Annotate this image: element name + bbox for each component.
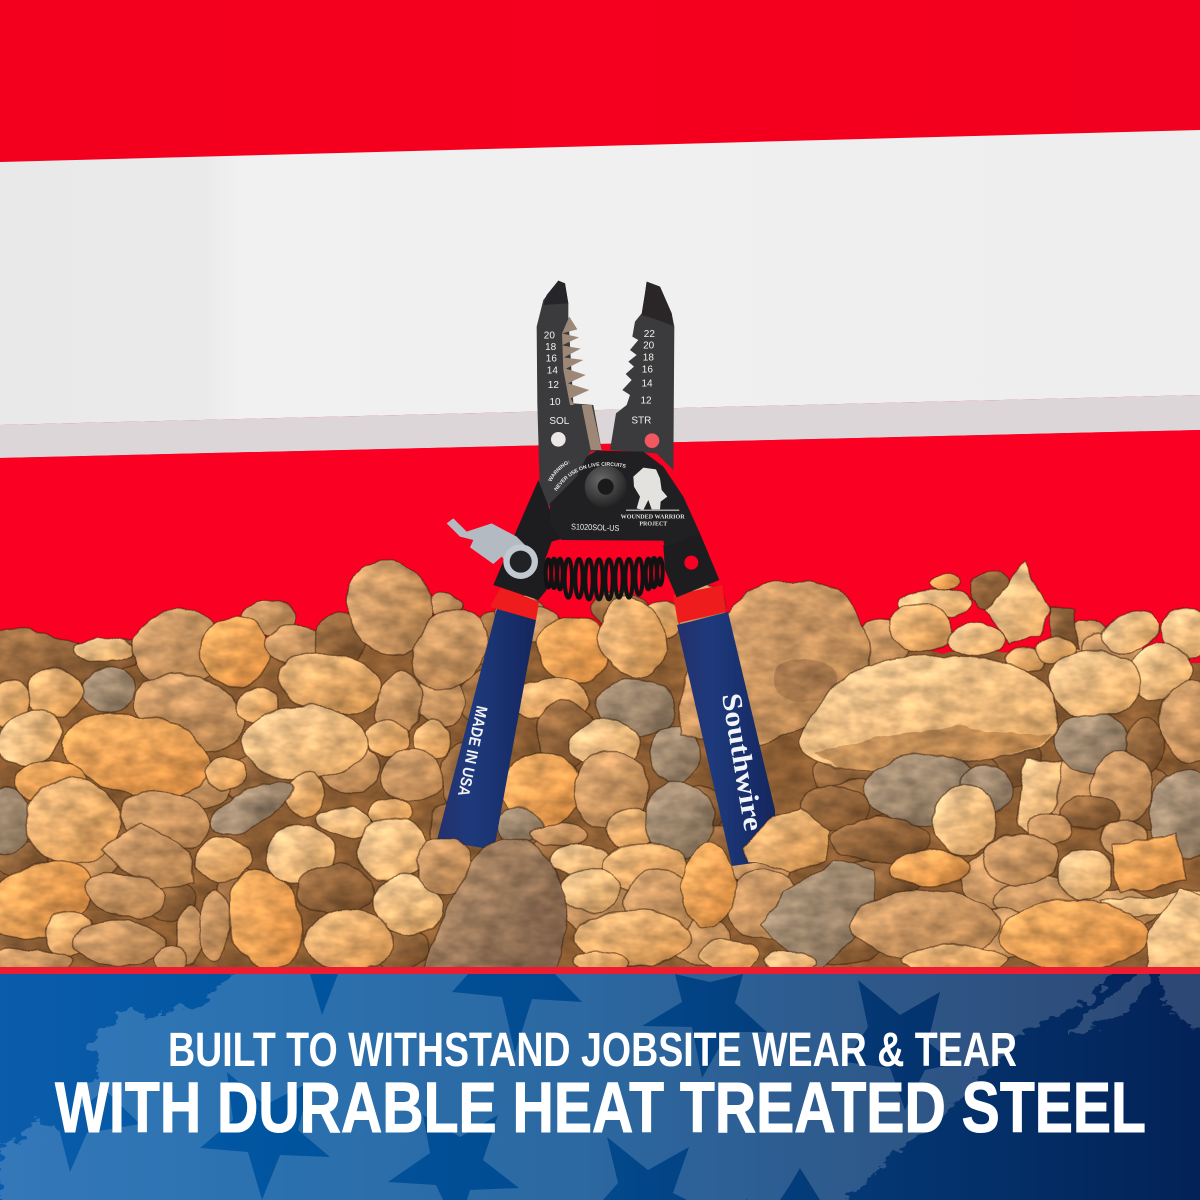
gauge numbers left: 12	[548, 380, 559, 391]
right arm	[663, 533, 719, 597]
gauge numbers right: 22	[644, 329, 655, 340]
rock pile back layer	[0, 548, 1200, 1000]
icon: soldier silhouette	[626, 468, 679, 511]
spring	[546, 558, 663, 599]
model number: S1020SOL-US	[571, 521, 620, 533]
jaw holes	[551, 432, 566, 447]
gauge numbers right: 20	[643, 341, 655, 352]
stars	[58, 974, 955, 1200]
gauge numbers left: 10	[549, 397, 561, 408]
right jaw	[610, 282, 674, 470]
text: southwire: Southwire	[715, 691, 769, 833]
gauge numbers right	[631, 329, 655, 426]
gauge numbers left: 18	[545, 342, 557, 353]
gauge numbers left: SOL	[549, 416, 570, 427]
right handle grip	[677, 612, 775, 866]
logo text: WOUNDED WARRIOR	[621, 513, 685, 520]
left jaw teeth	[562, 317, 602, 450]
stripe seam	[0, 395, 1200, 458]
left arm	[493, 480, 563, 600]
left red sleeve	[490, 587, 539, 620]
lower red stripe	[0, 430, 1200, 720]
right red sleeve	[673, 585, 726, 623]
plier head	[446, 280, 720, 602]
warning text: WARNING:	[548, 460, 570, 482]
logo text 2: PROJECT	[639, 521, 667, 527]
flag background	[0, 0, 1200, 720]
gauge numbers right: STR	[631, 415, 651, 426]
gauge numbers right: 14	[641, 379, 653, 390]
pivot bolt	[585, 466, 627, 508]
wire stripper pliers	[437, 280, 775, 866]
gauge numbers right: 16	[642, 365, 653, 376]
lock latch	[447, 518, 538, 579]
brush texture	[0, 960, 1200, 1200]
gauge numbers right: 18	[643, 353, 654, 364]
warning text line 2: NEVER USE ON LIVE CIRCUITS	[554, 462, 626, 491]
bottom banner	[0, 960, 1200, 1200]
gauge numbers left: 16	[546, 353, 557, 364]
text: made in usa: MADE IN USA	[454, 704, 490, 798]
gauge numbers right: 12	[640, 396, 652, 407]
left jaw	[537, 281, 602, 510]
pivot plate	[550, 451, 700, 547]
gauge numbers left: 14	[547, 365, 558, 376]
gauge numbers left	[544, 330, 570, 427]
blue gradient background	[0, 974, 1200, 1200]
white flag stripe	[0, 130, 1200, 425]
left handle grip	[437, 608, 536, 850]
rock pile front layer	[417, 808, 1200, 985]
red divider	[0, 967, 1200, 974]
gauge numbers left: 20	[544, 330, 555, 341]
